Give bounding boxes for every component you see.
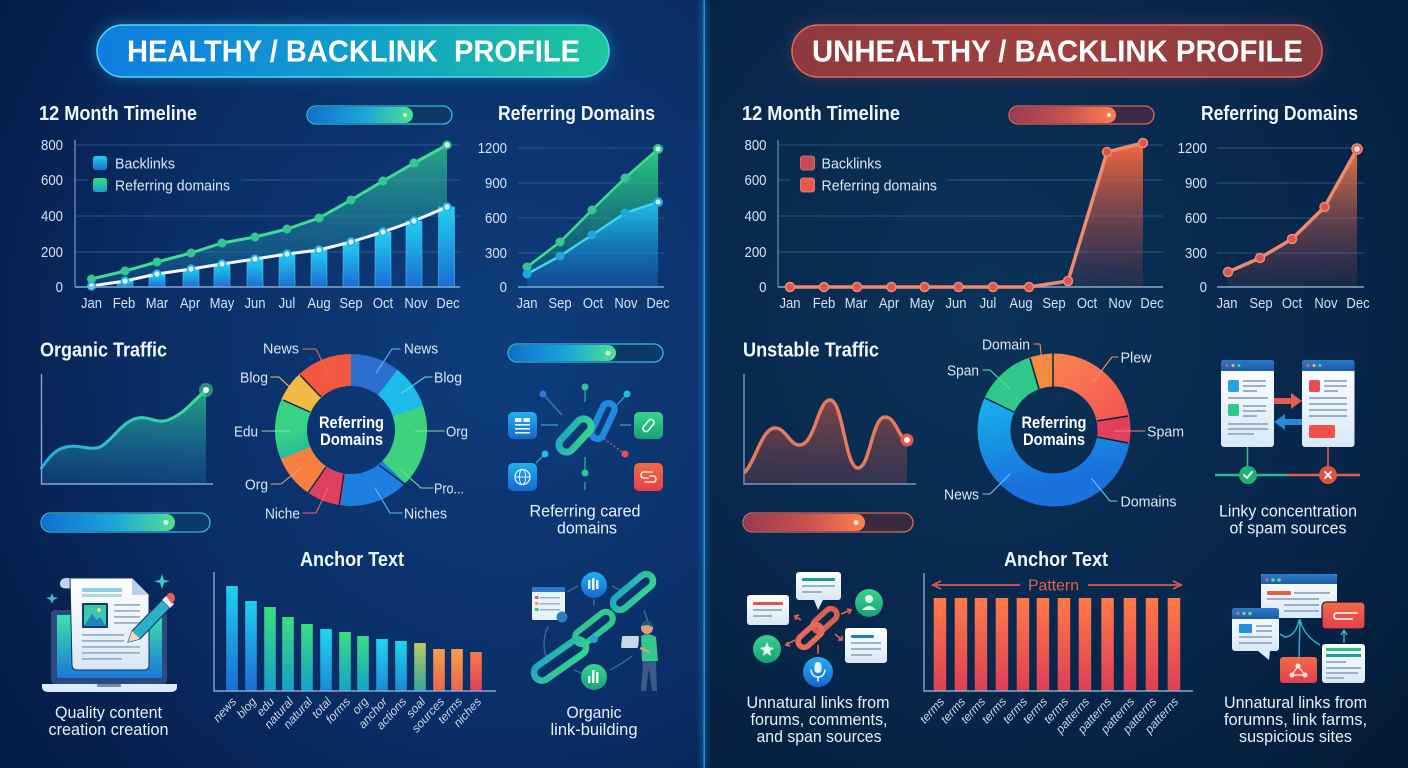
icon: unnatural links hub [747,572,887,687]
chart: unhealthy referring domains donut: Plew [1120,350,1152,366]
chart: unhealthy 12 month timeline: Jan [779,295,801,311]
chart: unhealthy 12 month timeline: 0 [759,278,767,295]
center divider [700,0,708,768]
chart: healthy referring domains donut [234,340,468,522]
chart: healthy referring domains donut: Org [245,476,268,494]
chart: healthy 12 month timeline: Feb [113,295,136,311]
pattern arrow: Pattern [1028,578,1079,594]
chart: healthy 12 month timeline: Dec [436,295,460,311]
chart: healthy referring domains: 600 [485,209,507,226]
bars: backlinks [117,207,454,287]
chart: unhealthy 12 month timeline: 600 [745,171,767,188]
background: unhealthy side [704,0,1408,768]
chart: organic traffic [42,374,213,484]
chart: unhealthy 12 month timeline: 200 [745,243,767,260]
chart: healthy 12 month timeline: Jun [244,295,266,311]
legend [93,156,230,194]
chart: healthy 12 month timeline: 200 [41,243,63,260]
chart: unhealthy referring domains donut: Domains [1023,430,1085,449]
progress bar: unhealthy timeline [1009,106,1154,124]
panel: unhealthy header [792,25,1322,77]
caption: linky concentration of spam sources [1219,502,1357,538]
chart: unhealthy referring domains donut: Domains [1120,494,1176,510]
chart: healthy anchor text bars: actions [373,695,409,732]
pattern arrow [933,578,1181,594]
chart: unhealthy anchor text bars: terms [1000,695,1030,726]
chart: unstable traffic [744,374,916,484]
chart: healthy referring domains donut: Blog [240,370,268,386]
chart: healthy anchor text bars: forms [323,695,353,726]
chart: healthy 12 month timeline: Jan [81,295,102,311]
chart: healthy referring domains donut: Blog [434,370,462,386]
chart: healthy 12 month timeline: Mar [146,295,169,311]
caption: unnatural links from forums: and span sources [756,727,882,746]
chart: unhealthy anchor text bars: patterns [1097,695,1137,737]
chart: unhealthy referring domains donut: Referring [1022,413,1086,432]
chart: healthy anchor text bars [210,572,496,735]
panel: healthy header [97,25,609,77]
chart: healthy referring domains: 0 [500,278,507,295]
progress bar: healthy timeline [307,106,452,124]
chart: healthy referring domains donut: Niche [265,506,300,522]
chart: unhealthy 12 month timeline: Apr [879,295,900,311]
chart: unhealthy 12 month timeline: Dec [1140,295,1164,311]
caption: referring cared domains: Referring cared [530,502,640,520]
chart: healthy 12 month timeline: 0 [56,278,63,295]
chart: healthy referring domains: 1200 [478,139,507,156]
icon: chain network [508,384,663,491]
chart: unhealthy 12 month timeline: 400 [745,207,767,224]
legend [800,156,937,194]
chart: unhealthy referring domains donut: News [944,486,979,504]
chart: healthy referring domains: Nov [614,295,638,311]
chart: unhealthy referring domains: 1200 [1178,139,1207,156]
icon: spam source windows [1215,360,1360,484]
line: referring domains [92,145,447,279]
chart: unhealthy 12 month timeline: Mar [845,295,868,311]
chart: healthy 12 month timeline: 400 [41,207,63,224]
chart: unhealthy referring domains donut: Spam [1147,424,1184,440]
chart: unhealthy 12 month timeline: Feb [813,295,836,311]
chart: healthy anchor text bars: sources [409,695,447,735]
chart: healthy anchor text bars: news [210,695,239,725]
chart: unhealthy anchor text bars: patterns [1052,695,1092,737]
caption: organic link-building: link-building [550,720,638,739]
caption: organic link-building: Organic [566,703,622,722]
chart: unhealthy anchor text bars: terms [1041,695,1071,726]
chart: unhealthy referring domains: Jan [1216,295,1238,311]
chart: unhealthy referring domains [1178,139,1370,311]
chart: unhealthy anchor text bars: patterns [1141,695,1181,737]
chart: unhealthy referring domains: 900 [1185,174,1207,191]
chart: healthy referring domains: Oct [583,295,603,311]
chart: unhealthy 12 month timeline [745,136,1164,311]
progress bar: referring cared domains [508,344,663,362]
caption: linky concentration of spam sources: Linky concentration [1219,502,1357,520]
panel: healthy header: HEALTHY / BACKLINK PROFILE [127,34,580,68]
caption: unnatural links from link farms: forumns, link farms, [1224,710,1367,729]
chart: unhealthy anchor text bars: terms [917,695,947,726]
chart: unhealthy referring domains: 0 [1200,278,1207,295]
legend: Referring domains [822,178,937,194]
chart: unhealthy referring domains donut: Domain [982,336,1030,354]
chart: unhealthy anchor text bars: terms [1020,695,1050,726]
chart: healthy anchor text bars: terms [435,695,465,726]
chart: unhealthy referring domains donut [944,336,1184,510]
chart: unhealthy referring domains: Nov [1314,295,1338,311]
chart: healthy anchor text bars: total [309,694,334,721]
chart: unhealthy referring domains: Sep [1249,295,1273,311]
chart: healthy referring domains donut: Edu [234,424,258,440]
chart: healthy 12 month timeline: Nov [404,295,428,311]
chart: unhealthy referring domains: Dec [1346,295,1370,311]
heading: healthy referring domains: Referring Domains [498,102,655,125]
chart: unhealthy referring domains: 300 [1185,244,1207,261]
chart: healthy 12 month timeline [41,136,460,311]
chart: healthy anchor text bars: natural [280,694,315,731]
chart: healthy referring domains: Jan [516,295,538,311]
chart: healthy 12 month timeline: Oct [373,295,393,311]
chart: unhealthy 12 month timeline: Nov [1108,295,1132,311]
chart: unhealthy 12 month timeline: May [910,295,934,311]
heading: healthy anchor text: Anchor Text [300,548,404,571]
chart: healthy referring domains donut: News [263,340,299,358]
icon: organic link-building chain [531,571,658,691]
heading: unhealthy referring domains: Referring Domains [1201,102,1358,125]
chart: healthy anchor text bars: org [349,694,371,717]
progress bar: organic traffic [41,513,210,532]
heading: organic traffic: Organic Traffic [40,338,167,362]
icon: quality content on laptop [42,574,177,692]
chart: healthy anchor text bars: edu [253,694,277,719]
chart: healthy referring domains donut: Niches [404,506,447,522]
chart: healthy 12 month timeline: 800 [41,136,63,153]
chart: healthy referring domains [478,139,670,311]
chart: healthy anchor text bars: anchor [355,694,391,731]
caption: unnatural links from forums: forums, comments, [750,710,888,729]
chart: unhealthy referring domains donut: Span [947,362,979,380]
chart: healthy 12 month timeline: 600 [41,171,63,188]
chart: healthy referring domains donut: Referring [319,413,384,432]
area: referring domains [92,145,447,286]
chart: healthy referring domains: Dec [646,295,670,311]
heading: unhealthy timeline: 12 Month Timeline [742,102,900,125]
caption: organic link-building [550,703,638,739]
chart: healthy referring domains: 300 [485,244,507,261]
caption: quality content creation: Quality content [55,703,162,722]
background: healthy side [0,0,704,768]
chart: unhealthy anchor text bars: patterns [1119,695,1159,737]
chart: unhealthy 12 month timeline: 800 [745,136,767,153]
chart: healthy 12 month timeline: Sep [339,295,363,311]
heading: unhealthy anchor text: Anchor Text [1004,548,1108,571]
caption: linky concentration of spam sources: of spam sources [1230,518,1346,538]
chart: unhealthy referring domains: 600 [1185,209,1207,226]
chart: healthy referring domains donut: Pro... [434,480,464,498]
chart: healthy referring domains donut: Org [446,424,468,440]
chart: unhealthy anchor text bars: patterns [1074,695,1114,737]
legend: Backlinks [115,156,175,172]
caption: unnatural links from link farms: Unnatural links from [1224,693,1367,712]
chart: unhealthy 12 month timeline: Jul [980,295,996,311]
chart: healthy referring domains donut: News [404,340,438,358]
chart: unhealthy 12 month timeline: Oct [1077,295,1097,311]
line: backlinks [92,207,447,286]
chart: unhealthy 12 month timeline: Sep [1042,295,1066,311]
caption: quality content creation: creation creation [48,720,168,739]
chart: healthy 12 month timeline: May [210,295,234,311]
chart: unhealthy anchor text bars: terms [979,695,1009,726]
chart: healthy referring domains donut: Domains [320,430,383,449]
chart: unhealthy 12 month timeline: Jun [945,295,967,311]
chart: healthy anchor text bars: niches [451,695,484,730]
caption: referring cared domains [530,502,640,538]
chart: unhealthy anchor text bars: terms [938,695,968,726]
icon: link farm windows [1232,574,1365,683]
caption: unnatural links from link farms: suspicious sites [1239,727,1352,746]
caption: unnatural links from forums: Unnatural links from [746,693,890,712]
heading: unstable traffic: Unstable Traffic [743,338,879,362]
chart: unhealthy 12 month timeline: Aug [1009,295,1033,311]
progress bar: unstable traffic [743,513,913,532]
chart: healthy anchor text bars: natural [261,694,296,731]
panel: unhealthy header: UNHEALTHY / BACKLINK PROFILE [812,34,1303,68]
caption: unnatural links from forums [746,693,890,746]
caption: quality content creation [48,703,168,739]
chart: healthy 12 month timeline: Apr [180,295,201,311]
chart: healthy referring domains: 900 [485,174,507,191]
legend: Backlinks [822,156,882,172]
caption: unnatural links from link farms [1224,693,1367,746]
chart: healthy 12 month timeline: Jul [279,295,295,311]
chart: healthy anchor text bars: soal [403,694,428,720]
chart: unhealthy referring domains: Oct [1282,295,1302,311]
chart: healthy 12 month timeline: Aug [307,295,331,311]
caption: referring cared domains: domains [557,518,617,538]
heading: healthy timeline: 12 Month Timeline [39,102,197,125]
chart: healthy anchor text bars: blog [234,694,259,721]
chart: healthy referring domains: Sep [548,295,572,311]
chart: unhealthy anchor text bars: terms [958,695,988,726]
legend: Referring domains [115,178,230,194]
chart: unhealthy anchor text bars [917,573,1193,737]
